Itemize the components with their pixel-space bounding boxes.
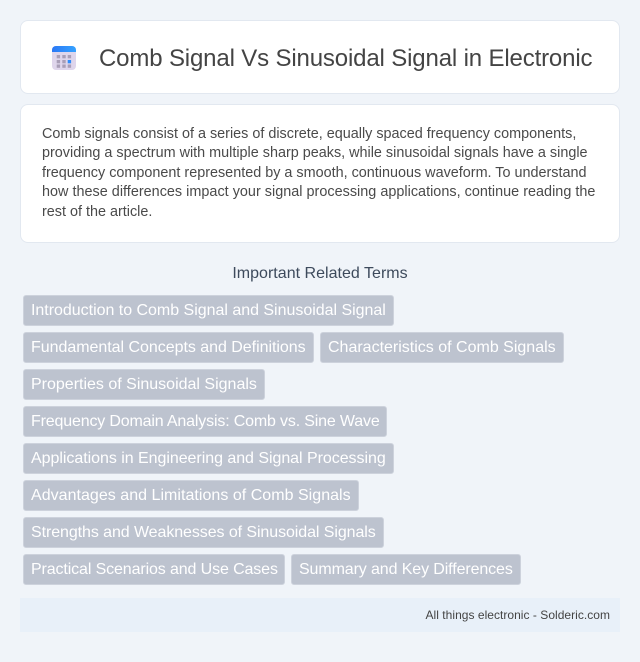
footer: All things electronic - Solderic.com xyxy=(426,608,610,622)
header card xyxy=(20,20,620,94)
title: Comb Signal Vs Sinusoidal Signal in Electronic xyxy=(99,45,592,72)
related term tags: Frequency Domain Analysis: Comb vs. Sine Wave xyxy=(31,413,380,430)
intro text panel: frequency component represented by a smooth, continuous waveform. To understand xyxy=(42,165,587,181)
section heading: Important Related Terms xyxy=(232,265,408,282)
icon: calendar xyxy=(52,46,76,70)
related term tags: Introduction to Comb Signal and Sinusoidal Signal xyxy=(31,302,386,319)
related term tags: Fundamental Concepts and Definitions xyxy=(31,339,306,356)
intro text panel: how these differences impact your signal processing applications, continue reading the xyxy=(42,184,595,200)
related term tags: Summary and Key Differences xyxy=(299,561,513,578)
related term tags: Advantages and Limitations of Comb Signals xyxy=(31,487,351,504)
intro text panel: rest of the article. xyxy=(42,204,152,220)
intro text panel: Comb signals consist of a series of discrete, equally spaced frequency components, xyxy=(42,126,576,142)
related term tags: Practical Scenarios and Use Cases xyxy=(31,561,278,578)
footer xyxy=(20,598,620,632)
related term tags: Characteristics of Comb Signals xyxy=(328,339,556,356)
intro text panel xyxy=(20,104,620,243)
related term tags: Applications in Engineering and Signal Processing xyxy=(31,450,386,467)
intro text panel: providing a spectrum with multiple sharp peaks, while sinusoidal signals have a single xyxy=(42,145,588,161)
related term tags: Strengths and Weaknesses of Sinusoidal Signals xyxy=(31,524,376,541)
related term tags: Properties of Sinusoidal Signals xyxy=(31,376,257,393)
